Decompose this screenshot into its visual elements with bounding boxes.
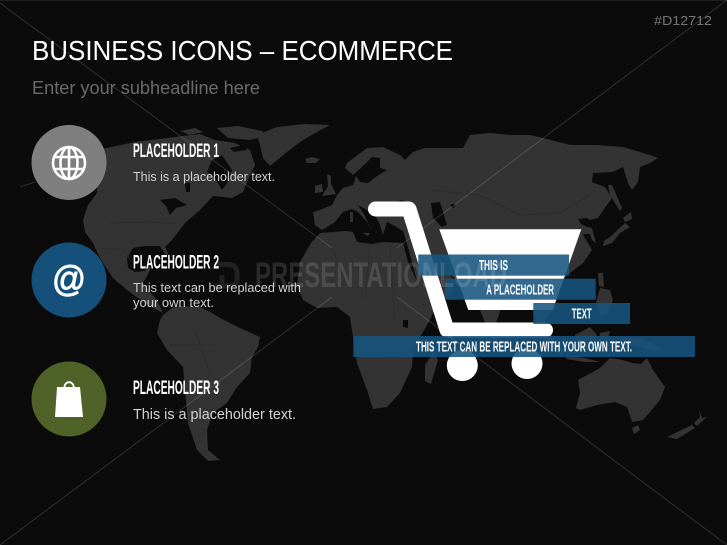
banner: text	[533, 303, 630, 324]
map: inland seas and lakes	[160, 144, 455, 328]
heading: placeholder 1: PLACEHOLDER 1	[133, 141, 219, 162]
map: Arctic islands	[180, 126, 266, 140]
title: BUSINESS ICONS – ECOMMERCE	[32, 35, 453, 66]
map: British Isles	[315, 174, 336, 196]
icon circle: at sign	[32, 242, 106, 318]
world map	[83, 124, 707, 461]
text: placeholder 2 body: This text can be replaced with	[133, 280, 301, 295]
text: placeholder 3 body: This is a placeholder text.	[133, 406, 296, 423]
map: Iceland	[305, 157, 320, 163]
map: Madagascar	[425, 351, 438, 384]
banner: text: TEXT	[572, 307, 592, 323]
banner: this text can be replaced	[353, 336, 695, 357]
map: country borders	[103, 190, 590, 395]
icon: shopping cart	[376, 209, 581, 381]
heading: placeholder 3: PLACEHOLDER 3	[133, 378, 219, 399]
icon circle: globe	[32, 125, 106, 200]
map: South America	[157, 306, 260, 461]
banner: this is	[418, 254, 569, 276]
watermark: PRESENTATIONLOAD	[255, 256, 507, 295]
map: Japan and Sakhalin	[603, 185, 632, 246]
text: placeholder 1 body: This is a placeholder text.	[133, 169, 275, 184]
panel: item 2	[32, 242, 301, 318]
map: Greenland	[257, 124, 330, 166]
map: North America	[83, 134, 255, 313]
banner: this is: THIS IS	[479, 258, 508, 274]
icon circle: at sign: @	[52, 258, 86, 299]
icon circle: shopping bag	[32, 362, 106, 436]
map: Africa	[297, 231, 440, 409]
watermark	[214, 256, 507, 295]
map: Southeast Asian islands	[538, 273, 665, 362]
panel: item 1	[32, 125, 275, 200]
panel: item 3	[32, 362, 296, 436]
slide code: #D12712	[654, 14, 712, 28]
map: Eurasia	[313, 133, 658, 336]
map: Tasmania	[632, 425, 640, 434]
map: Sri Lanka	[491, 336, 496, 344]
text: placeholder 2 body	[133, 280, 301, 310]
map: New Zealand	[667, 410, 707, 439]
heading: placeholder 2: PLACEHOLDER 2	[133, 252, 219, 274]
banner: a placeholder	[445, 279, 596, 300]
subheadline: Enter your subheadline here	[32, 77, 260, 98]
map: Australia	[576, 358, 665, 422]
text: placeholder 2 body: your own text.	[133, 295, 214, 310]
map: Mediterranean islands	[350, 212, 370, 236]
banner: a placeholder: A PLACEHOLDER	[486, 282, 554, 298]
